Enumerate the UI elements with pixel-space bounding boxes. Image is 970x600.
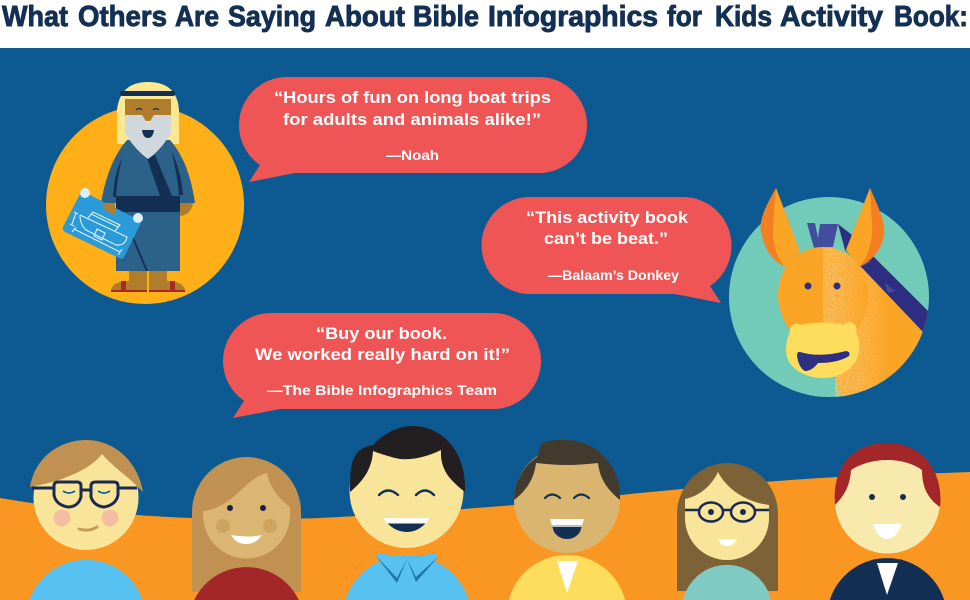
title: Others [78, 1, 167, 33]
person 1: glasses and blue shirt [29, 440, 143, 600]
speech bubble: donkey [481, 197, 732, 303]
person 2: long hair and red shirt [192, 457, 301, 600]
speech bubble: donkey: “This activity book [526, 208, 689, 227]
speech bubble: team: —The Bible Infographics Team [267, 382, 497, 398]
icon: Noah [46, 82, 244, 304]
speech bubble: team [223, 313, 541, 418]
speech bubble: donkey: —Balaam’s Donkey [548, 267, 679, 283]
title: Infographics [488, 1, 658, 33]
person 4: brown skin and yellow shirt [509, 440, 625, 600]
speech bubble: Noah [239, 77, 587, 182]
title: About [325, 1, 405, 33]
title: What [2, 1, 68, 33]
speech bubble: Noah: —Noah [386, 147, 439, 163]
speech bubble: team: We worked really hard on it!” [255, 345, 510, 364]
title: Bible [413, 1, 479, 33]
icon: Balaam's donkey [729, 188, 929, 397]
title: Kids [715, 1, 772, 33]
person 3: black hair and blue collared shirt [345, 426, 469, 600]
speech bubble: Noah: “Hours of fun on long boat trips [274, 88, 551, 107]
title: Activity [780, 1, 883, 33]
title: Are [175, 1, 219, 33]
speech bubble: donkey: can’t be beat.” [544, 229, 668, 248]
title: for [667, 1, 702, 33]
title: Saying [228, 1, 316, 33]
speech bubble: Noah: for adults and animals alike!” [283, 110, 541, 129]
orange ground [0, 472, 970, 600]
person 5: long brown hair and teal shirt [677, 463, 778, 600]
person 6: red hair and navy suit [830, 443, 944, 600]
speech bubble: team: “Buy our book. [316, 324, 447, 343]
title [2, 1, 968, 33]
